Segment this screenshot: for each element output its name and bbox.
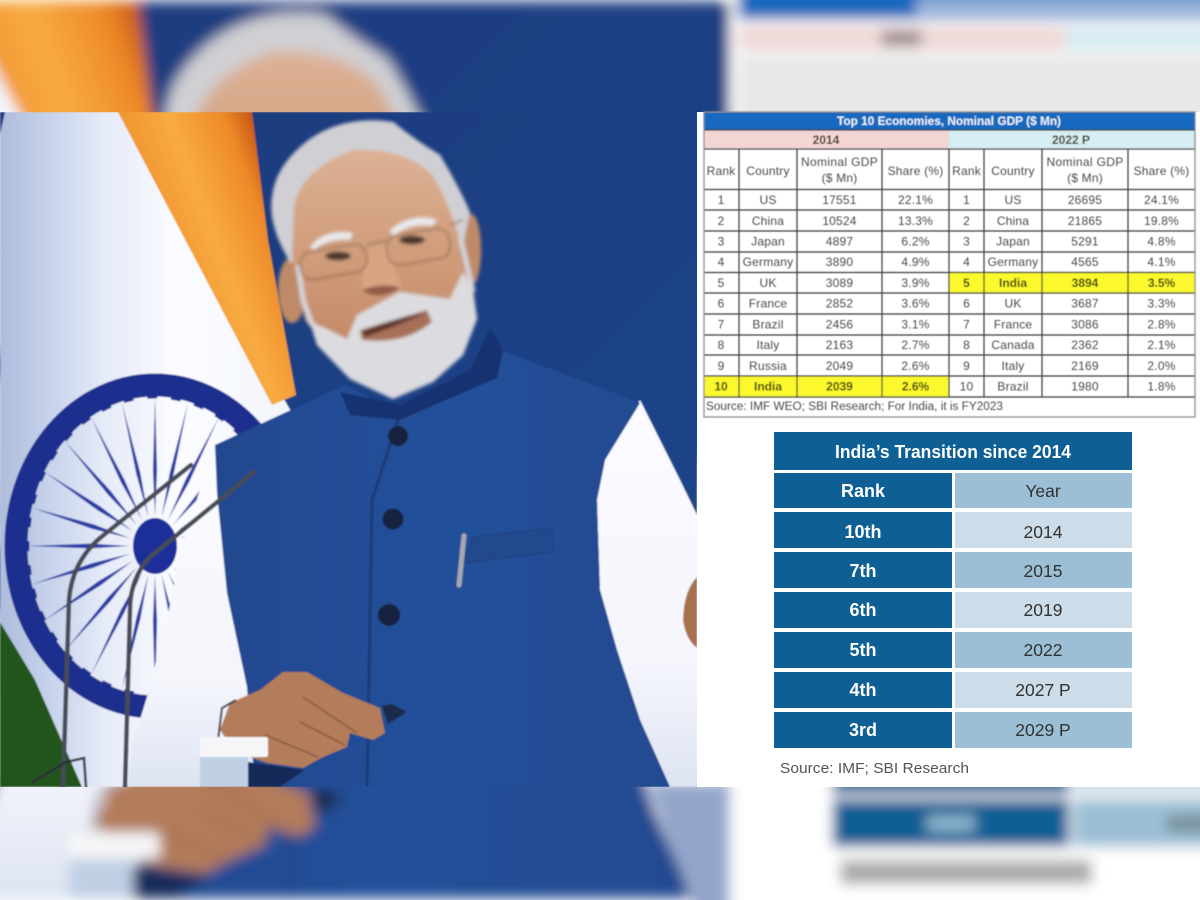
row 5: 3089 [826, 276, 853, 290]
jacket [215, 350, 670, 787]
row 3: 4897 [826, 234, 853, 248]
row 7: 7 [718, 318, 725, 332]
row 3: Japan [996, 234, 1030, 248]
row 5th 2022: 2022 [1024, 640, 1062, 660]
flag saffron band [118, 112, 296, 405]
row 7: 7 [963, 318, 970, 332]
column headers: Country [991, 164, 1035, 178]
row 6: UK [1004, 296, 1022, 310]
column headers: ($ Mn) [1067, 171, 1103, 185]
row 8 [718, 338, 1176, 352]
beard [310, 272, 477, 399]
row 5th 2022: 5th [850, 640, 876, 660]
header 2022 P [949, 130, 1195, 149]
row 4th 2027 P: 4th [850, 680, 876, 700]
row 10: 10 [714, 380, 728, 394]
row 4: Germany [743, 255, 793, 269]
row 3rd 2029 P: 3rd [849, 720, 877, 740]
row 8: Canada [991, 338, 1035, 352]
row 6th 2019: 6th [850, 600, 876, 620]
row 1: US [1004, 193, 1022, 207]
row 6: 6 [963, 296, 970, 310]
row 1 [718, 193, 1179, 207]
row 6: France [749, 296, 787, 310]
header row: Rank [841, 481, 886, 501]
row 3: 3 [718, 234, 725, 248]
row 6th 2019: 2019 [1024, 600, 1062, 620]
gesturing hand [218, 672, 385, 768]
jacket collar [340, 328, 503, 420]
row 2: 10524 [822, 214, 857, 228]
nose shadow [362, 285, 400, 296]
row 10: 2.6% [902, 380, 930, 394]
row 9: 9 [718, 359, 725, 373]
highlight: India 2022 [949, 272, 1195, 293]
row 9: 2.0% [1147, 359, 1176, 373]
face [292, 150, 468, 385]
row 7: 3086 [1071, 318, 1099, 332]
flag white band [0, 112, 296, 787]
row 5: 5 [718, 276, 725, 290]
row 4th 2027 P [774, 672, 1132, 708]
microphone stands [33, 465, 254, 787]
row 3rd 2029 P: 2029 P [1015, 720, 1071, 740]
eyebrows [310, 218, 437, 250]
row 2: 21865 [1068, 214, 1102, 228]
row 5: 3.9% [901, 276, 930, 290]
row 10th 2014: 10th [844, 522, 882, 542]
row 10: 1.8% [1147, 380, 1176, 394]
row 6: 6 [718, 296, 725, 310]
row 9: Russia [749, 359, 787, 373]
transition table title [774, 432, 1132, 470]
column headers: Rank [952, 164, 982, 178]
sideburns [298, 240, 473, 325]
row 4 [718, 255, 1176, 269]
header 2014 [704, 130, 949, 149]
jacket buttons [378, 426, 408, 626]
row 9: 9 [963, 359, 970, 373]
row 4: 4 [963, 255, 970, 269]
nose shading [362, 249, 401, 290]
flag green band [0, 622, 82, 787]
column headers: Share (%) [888, 164, 943, 178]
mouth [360, 310, 432, 341]
row 3: 3 [963, 234, 970, 248]
jacket pocket [463, 528, 553, 563]
row 9: 2049 [826, 359, 853, 373]
row 1: 1 [718, 193, 725, 207]
water glass [200, 737, 268, 787]
header row [774, 473, 1132, 508]
column headers: ($ Mn) [822, 171, 857, 185]
row 1: 22.1% [898, 193, 933, 207]
row 10 [714, 380, 1176, 394]
header 2014: 2014 [813, 133, 840, 147]
row 10: 1980 [1071, 380, 1099, 394]
row 7th 2015 [774, 552, 1132, 588]
row 7: 3.1% [901, 318, 930, 332]
row 2: China [752, 214, 784, 228]
row 1: US [759, 193, 777, 207]
pen clip [459, 536, 464, 585]
row 5 [718, 276, 1176, 290]
transition table title: India’s Transition since 2014 [835, 442, 1071, 462]
highlight: India 2014 [704, 376, 949, 397]
row 7: Brazil [752, 318, 784, 332]
row 10: 2039 [826, 380, 853, 394]
row 5: 3894 [1072, 276, 1099, 290]
row 3: Japan [751, 234, 785, 248]
row 7: 2456 [826, 318, 853, 332]
row 1: 24.1% [1144, 193, 1179, 207]
row 3rd 2029 P [774, 712, 1132, 748]
jacket placket seam [367, 420, 398, 787]
row 7th 2015: 2015 [1024, 561, 1062, 581]
row 1: 1 [963, 193, 970, 207]
row 10: 10 [960, 380, 973, 394]
row 10: Brazil [997, 380, 1029, 394]
glasses [298, 220, 463, 282]
transition table source note: Source: IMF; SBI Research [780, 760, 969, 777]
photo: speaker in front of Indian flag [0, 112, 697, 787]
row 4: Germany [988, 255, 1038, 269]
row 3: 4.8% [1147, 234, 1176, 248]
table title bar: Top 10 Economies, Nominal GDP ($ Mn) [837, 114, 1061, 128]
row 8: 2.1% [1147, 338, 1176, 352]
ears [278, 214, 481, 323]
row 4: 4.9% [901, 255, 930, 269]
photo backdrop [0, 112, 697, 787]
row 6: 3.3% [1147, 296, 1176, 310]
row 4: 4 [718, 255, 725, 269]
row 6: 2852 [826, 296, 853, 310]
row 8: 8 [963, 338, 970, 352]
right hand at edge [683, 577, 697, 648]
row 3: 6.2% [901, 234, 930, 248]
row 7: France [994, 318, 1032, 332]
row 2: 2 [718, 214, 725, 228]
row 3 [718, 234, 1176, 248]
column headers [707, 155, 1189, 185]
row 10: India [754, 380, 782, 394]
row 2: China [997, 214, 1029, 228]
header 2022 P: 2022 P [1052, 133, 1090, 147]
column headers: Share (%) [1134, 164, 1189, 178]
column headers: Nominal GDP [1046, 155, 1124, 169]
shadow beneath hand [248, 762, 305, 787]
row 4th 2027 P: 2027 P [1015, 680, 1071, 700]
header row: Year [1025, 481, 1061, 501]
white shirt right sleeve [597, 400, 697, 787]
row 9 [718, 359, 1176, 373]
row 5th 2022 [774, 632, 1132, 668]
GDP table: top 10 economies [704, 112, 1195, 417]
row 1: 26695 [1068, 193, 1102, 207]
row 5: India [999, 276, 1027, 290]
row 8: 2.7% [901, 338, 930, 352]
row 10th 2014: 2014 [1024, 522, 1063, 542]
row 4: 3890 [826, 255, 853, 269]
table title bar [704, 112, 1195, 130]
white content panel [697, 112, 1200, 787]
row 6: 3687 [1071, 296, 1099, 310]
row 1: 17551 [822, 193, 857, 207]
row 8: 2163 [826, 338, 853, 352]
head [271, 120, 481, 399]
row 2: 2 [963, 214, 970, 228]
row 5: 3.5% [1148, 276, 1176, 290]
row 6th 2019 [774, 592, 1132, 628]
row 8: 2362 [1071, 338, 1099, 352]
white shirt left sleeve [128, 455, 265, 787]
jacket fastening flap [382, 704, 407, 724]
row 2 [718, 214, 1179, 228]
row 8: 8 [718, 338, 725, 352]
row 9: 2169 [1071, 359, 1099, 373]
row 2: 19.8% [1144, 214, 1179, 228]
row 5: 5 [963, 276, 970, 290]
column headers: Country [746, 164, 790, 178]
column headers: Rank [707, 164, 736, 178]
row 3: 5291 [1071, 234, 1099, 248]
column headers: Nominal GDP [801, 155, 878, 169]
row 9: Italy [1001, 359, 1025, 373]
row 7: 2.8% [1147, 318, 1176, 332]
hair [271, 120, 470, 262]
row 4: 4.1% [1147, 255, 1176, 269]
row 2: 13.3% [898, 214, 933, 228]
row 10th 2014 [774, 512, 1132, 548]
row 4: 4565 [1071, 255, 1099, 269]
row 8: Italy [756, 338, 780, 352]
row 5: UK [759, 276, 777, 290]
Ashoka chakra [16, 385, 294, 707]
row 7th 2015: 7th [850, 561, 876, 581]
row 9: 2.6% [901, 359, 930, 373]
row 6 [718, 296, 1176, 310]
eyes [325, 236, 425, 260]
table source note: Source: IMF WEO; SBI Research; For India, it is FY2023 [706, 401, 1003, 413]
row 7 [718, 318, 1176, 332]
transition table: India's rank since 2014 [774, 432, 1132, 777]
row 6: 3.6% [901, 296, 930, 310]
